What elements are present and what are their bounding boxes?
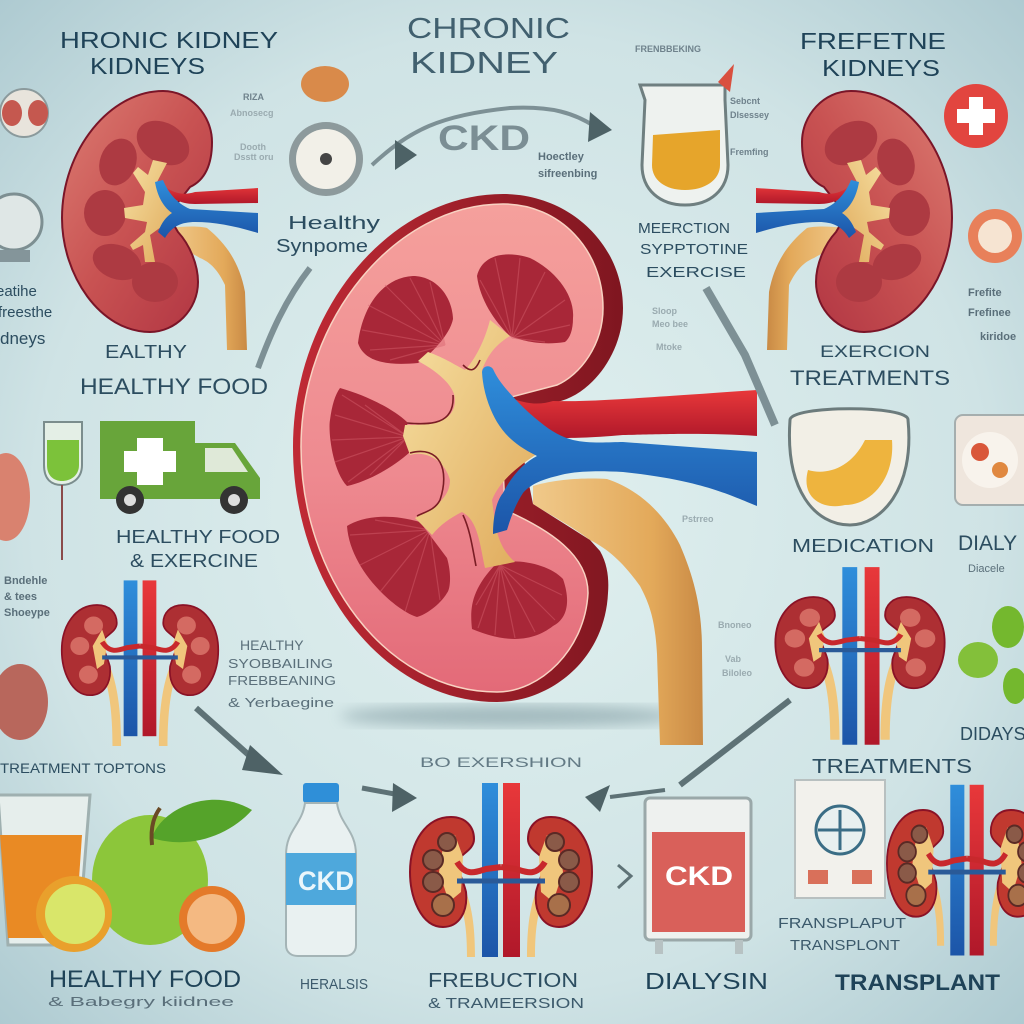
vein xyxy=(482,366,757,534)
labels: top centre right: Hoectley xyxy=(538,151,585,163)
icon: ambulance xyxy=(100,421,260,514)
icon: dialysis bag xyxy=(645,798,751,954)
icon: water bottle xyxy=(286,783,356,956)
kidney pair: bottom centre xyxy=(410,783,592,957)
heading: top right: FREFETNE xyxy=(800,28,946,54)
labels: medication and dialysis: MEDICATION xyxy=(792,536,934,556)
kidney fragment: left edge xyxy=(0,453,30,541)
icon: red cross badge xyxy=(944,84,1008,148)
arrow: small chevron xyxy=(618,865,631,888)
labels: small captions top left xyxy=(230,92,274,162)
kidney pair: right xyxy=(775,567,945,745)
labels: left middle: FREBBEANING xyxy=(228,673,336,688)
heading: top right: KIDNEYS xyxy=(822,55,940,81)
labels: healthy food and exercise: & EXERCINE xyxy=(130,551,258,571)
labels: left upper xyxy=(0,213,380,348)
icon: gauge xyxy=(289,122,363,196)
labels: left upper: Synpome xyxy=(276,236,368,256)
label: transplant: TRANSPLANT xyxy=(835,970,1001,995)
labels: healthy food and exercise: & tees xyxy=(4,591,37,603)
labels: left middle: HEALTHY xyxy=(240,637,304,653)
label: frebuction xyxy=(428,970,584,1012)
labels: top centre right: Fremfing xyxy=(730,147,769,157)
kidney: main cross-section xyxy=(293,194,757,745)
label: transplant xyxy=(778,915,1001,995)
kidney pair: left xyxy=(62,580,218,746)
labels: small captions top left: RIZA xyxy=(243,92,264,102)
labels: left middle: SYOBBAILING xyxy=(228,656,333,671)
labels: top centre right: EXERCISE xyxy=(646,264,746,281)
labels: left upper: dneys xyxy=(0,329,45,348)
renal pelvis xyxy=(403,320,537,568)
labels: medication and dialysis: DIALY xyxy=(958,532,1017,555)
CKD label with arrow arc: CKD xyxy=(438,119,530,158)
kidney: top left xyxy=(62,91,258,350)
heading: top right xyxy=(800,28,946,81)
label: bottom left food: & Babegry kiidnee xyxy=(48,994,234,1009)
arrow: right side line xyxy=(706,288,775,425)
labels: treatments right xyxy=(790,287,1016,390)
arrow: lower left xyxy=(196,708,283,775)
labels: small captions top left: Dsstt oru xyxy=(234,152,274,162)
labels: medication and dialysis xyxy=(792,532,1017,575)
title: CHRONIC xyxy=(407,13,570,45)
labels: faint captions beside kidney: Meo bee xyxy=(652,319,688,329)
artery xyxy=(505,390,757,438)
labels: top centre right: FRENBBEKING xyxy=(635,44,701,54)
labels: left upper: Healthy xyxy=(288,213,380,233)
labels: treatments right: TREATMENTS xyxy=(790,367,950,390)
label: no exersion: BO EXERSHION xyxy=(420,754,582,770)
heading: top left: HRONIC KIDNEY xyxy=(60,27,278,53)
icon: IV bag xyxy=(44,422,82,560)
labels: faint captions beside kidney: Sloop xyxy=(652,306,677,316)
labels: treatments lower right xyxy=(812,724,1024,778)
labels: faint captions beside kidney: Mtoke xyxy=(656,342,682,352)
labels: faint captions beside kidney xyxy=(652,306,753,678)
labels: top centre right: SYPPTOTINE xyxy=(640,241,748,258)
icon: food top xyxy=(301,66,349,102)
labels: faint captions beside kidney: Pstrreo xyxy=(682,514,714,524)
title: KIDNEY xyxy=(410,45,558,80)
labels: top centre right: Dlsessey xyxy=(730,110,769,120)
icon: ECG card xyxy=(795,780,885,898)
icon: drink glass xyxy=(0,795,90,945)
labels: healthy food and exercise xyxy=(4,527,280,619)
labels: left middle xyxy=(228,637,336,710)
arrow: left down line xyxy=(258,268,310,368)
labels: treatments right: EXERCION xyxy=(820,342,930,361)
label: bottom left food xyxy=(48,966,241,1009)
label: frebuction: FREBUCTION xyxy=(428,970,578,992)
heading: top left: KIDNEYS xyxy=(90,53,205,79)
title xyxy=(407,13,570,80)
icon: right orange badge xyxy=(968,209,1022,263)
labels: faint captions beside kidney: Biloleo xyxy=(722,668,753,678)
kidney: top right xyxy=(756,91,952,350)
icon: left scale xyxy=(0,194,42,262)
labels: top centre right: MEERCTION xyxy=(638,220,730,237)
label: frebuction: & TRAMEERSION xyxy=(428,995,584,1012)
kidney pair: bottom right xyxy=(887,785,1024,956)
labels: healthy food left: EALTHY xyxy=(105,342,187,362)
labels: healthy food left: HEALTHY FOOD xyxy=(80,374,268,399)
labels: treatments right: Frefinee xyxy=(968,307,1011,319)
icon: dialysis bag: CKD xyxy=(665,861,733,891)
arrow: to kidney pair xyxy=(362,783,417,812)
label: treatment options: TREATMENT TOPTONS xyxy=(0,760,166,776)
kidney body xyxy=(293,194,623,702)
arrow: lower right xyxy=(585,700,790,812)
kidney fragment: lower left edge xyxy=(0,664,48,740)
icon: green apple xyxy=(92,800,252,945)
label: bottom left food: HEALTHY FOOD xyxy=(49,966,241,993)
icon: food tray xyxy=(955,415,1024,505)
label: transplant: FRANSPLAPUT xyxy=(778,915,906,932)
labels: top centre right: Sebcnt xyxy=(730,96,760,106)
labels: medication and dialysis: Diacele xyxy=(968,563,1005,575)
label: heralsis: HERALSIS xyxy=(300,976,368,993)
label: transplant: TRANSPLONT xyxy=(790,937,900,954)
icon: green fruit right xyxy=(958,606,1024,704)
icon: lime slice xyxy=(36,876,112,952)
labels: small captions top left: Dooth xyxy=(240,142,266,152)
labels: treatments right: kiridoe xyxy=(980,331,1016,343)
icon: beaker with urine xyxy=(640,64,734,205)
icon: left small organ xyxy=(0,89,48,137)
labels: top centre right: sifreenbing xyxy=(538,168,597,180)
icon: water bottle: CKD xyxy=(298,866,354,896)
icon: stomach bowl xyxy=(789,409,909,525)
labels: treatments lower right: DIDAYS xyxy=(960,724,1024,744)
labels: faint captions beside kidney: Bnoneo xyxy=(718,620,752,630)
ureter xyxy=(533,479,703,745)
labels: healthy food left xyxy=(80,342,268,399)
labels: top centre right xyxy=(538,44,769,281)
labels: treatments right: Frefite xyxy=(968,287,1002,299)
CKD label with arrow arc xyxy=(372,108,612,170)
pyramids xyxy=(358,276,453,364)
labels: healthy food and exercise: HEALTHY FOOD xyxy=(116,527,280,547)
labels: faint captions beside kidney: Vab xyxy=(725,654,742,664)
icon: orange slice xyxy=(179,886,245,952)
labels: healthy food and exercise: Shoeype xyxy=(4,607,50,619)
labels: left middle: & Yerbaegine xyxy=(228,695,334,710)
heading: top left xyxy=(60,27,278,79)
label: dialysin: DIALYSIN xyxy=(645,968,768,994)
labels: treatments lower right: TREATMENTS xyxy=(812,756,972,778)
labels: healthy food and exercise: Bndehle xyxy=(4,575,47,587)
labels: small captions top left: Abnosecg xyxy=(230,108,274,118)
